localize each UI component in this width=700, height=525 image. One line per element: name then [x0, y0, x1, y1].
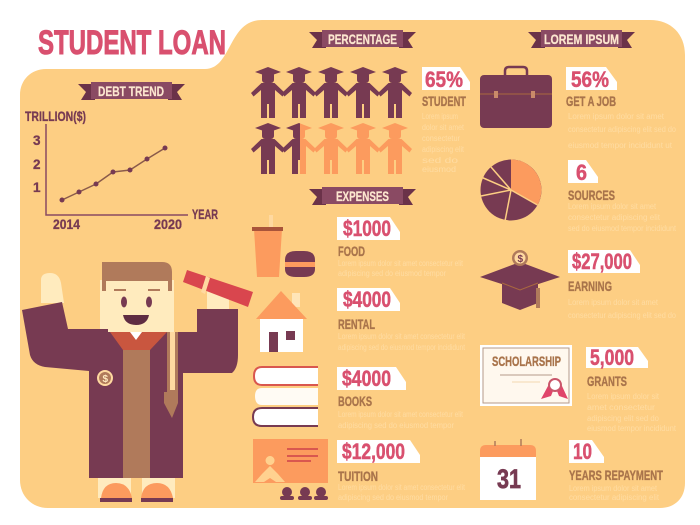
- icon: briefcase: [480, 67, 552, 128]
- icon: stack of books: [253, 367, 318, 426]
- stat: books: adipiscing sed do eiusmod tempor: [338, 421, 454, 430]
- chart: people pictogram 65%: [251, 67, 412, 174]
- stat: books: BOOKS: [338, 393, 372, 409]
- stat: tuition: TUITION: [338, 468, 378, 484]
- stat: get a job: eiusmod tempor incididunt ut: [568, 141, 673, 150]
- stat: sources: 6: [576, 160, 587, 185]
- icon: calendar: 31: [497, 464, 521, 494]
- stat: earning: $27,000: [572, 249, 632, 274]
- stat: rental: $4000: [343, 287, 391, 312]
- stat: grants: Lorem ipsum dolor sit: [587, 392, 660, 401]
- stat: grants: adipiscing elit sed do: [587, 414, 660, 423]
- stat: 65% student: consectetur: [422, 134, 460, 143]
- icon: drink and burger: [252, 215, 315, 277]
- banner: expenses: [309, 187, 416, 205]
- line chart: debt trend: TRILLION($): [25, 109, 86, 124]
- banner: percentage: [309, 30, 416, 48]
- stat: tuition: Lorem ipsum dolor sit amet consectetur elit: [338, 483, 466, 492]
- stat: food: $1000: [343, 216, 391, 241]
- icon: graduation cap with coin: [480, 250, 560, 310]
- stat: sources: consectetur adipiscing elit: [568, 213, 661, 222]
- stat: earning: EARNING: [568, 278, 612, 294]
- stat: get a job: consectetur adipiscing elit sed do: [568, 125, 676, 134]
- stat: tuition: adipiscing sed do eiusmod tempor: [338, 493, 448, 502]
- illustration: graduate: [22, 262, 253, 502]
- stat: grants: eiusmod tempor incididunt: [587, 424, 677, 433]
- stat: rental: adipiscing sed do eiusmod tempor incididunt: [338, 343, 466, 352]
- stat: sources: SOURCES: [568, 187, 615, 203]
- stat: grants: 5,000: [590, 345, 634, 370]
- banner: debt trend: DEBT TREND: [98, 83, 164, 99]
- stat: tuition: [337, 439, 466, 502]
- stat: get a job: [566, 67, 676, 150]
- stat: years repayment: Lorem ipsum dolor sit amet: [569, 484, 658, 493]
- icon: graduation cap with coin: $: [518, 254, 524, 265]
- stat: books: Lorem ipsum dolor sit amet consectetur elit: [338, 410, 464, 419]
- stat: sources: Lorem ipsum dolor sit amet: [568, 202, 657, 211]
- stat: grants: GRANTS: [587, 373, 627, 389]
- chart: pie of sources: [480, 160, 542, 221]
- banner: lorem ipsum: LOREM IPSUM: [544, 31, 619, 47]
- stat: grants: amet consectetur: [587, 403, 655, 412]
- stat: earning: consectetur adipiscing elit sed do: [568, 311, 676, 320]
- stat: get a job: 56%: [571, 67, 609, 92]
- stat: food: Lorem ipsum dolor sit amet consectetur elit: [338, 259, 464, 268]
- banner: percentage: PERCENTAGE: [328, 31, 397, 47]
- stat: food: adipiscing sed do eiusmod tempor: [338, 269, 446, 278]
- icon: scholarship certificate: [480, 345, 572, 406]
- line chart: debt trend: 2014: [53, 217, 80, 232]
- stat: 65% student: eiusmod: [422, 165, 456, 174]
- illustration: graduate: $: [102, 374, 108, 385]
- line chart: debt trend: 3: [33, 133, 41, 148]
- line chart: debt trend: 1: [33, 180, 41, 195]
- banner: expenses: EXPENSES: [336, 188, 389, 204]
- stat: rental: [337, 287, 466, 352]
- stat: 65% student: STUDENT: [422, 93, 466, 109]
- stat: years repayment: [569, 439, 663, 502]
- stat: years repayment: 10: [573, 439, 592, 464]
- stat: sources: [568, 160, 677, 233]
- stat: books: $4000: [342, 366, 391, 391]
- stat: 65% student: dolor sit amet: [422, 123, 465, 132]
- stat: sources: sed do eiusmod tempor incididunt: [568, 224, 677, 233]
- stat: years repayment: consectetur adipiscing elit: [569, 493, 660, 502]
- stat: 65% student: [422, 67, 470, 174]
- stat: 65% student: adipiscing elit: [422, 145, 465, 154]
- icon: lecture screen and audience: [253, 439, 328, 500]
- stat: rental: RENTAL: [338, 316, 375, 332]
- stat: books: [337, 366, 464, 430]
- stat: tuition: $12,000: [342, 439, 405, 464]
- stat: get a job: GET A JOB: [566, 93, 616, 109]
- stat: earning: [568, 249, 676, 320]
- stat: 65% student: 65%: [425, 67, 463, 92]
- stat: get a job: Lorem ipsum dolor sit amet: [568, 112, 665, 121]
- line chart: debt trend: [25, 109, 218, 232]
- icon: house: [256, 291, 307, 352]
- icon: scholarship certificate: SCHOLARSHIP: [492, 353, 561, 369]
- line chart: debt trend: 2: [33, 157, 41, 172]
- stat: 65% student: Lorem ipsum: [422, 112, 458, 121]
- title: STUDENT LOAN: [38, 24, 226, 62]
- icon: calendar: [480, 439, 536, 500]
- line chart: debt trend: YEAR: [192, 207, 218, 222]
- stat: food: FOOD: [338, 243, 365, 259]
- stat: 65% student: sed do: [422, 156, 459, 165]
- stat: earning: Lorem ipsum dolor sit amet: [568, 298, 659, 307]
- stat: food: [337, 216, 464, 278]
- stat: grants: [586, 345, 677, 433]
- line chart: debt trend: 2020: [154, 217, 182, 232]
- stat: rental: Lorem ipsum dolor sit amet consectetur elit: [338, 332, 466, 341]
